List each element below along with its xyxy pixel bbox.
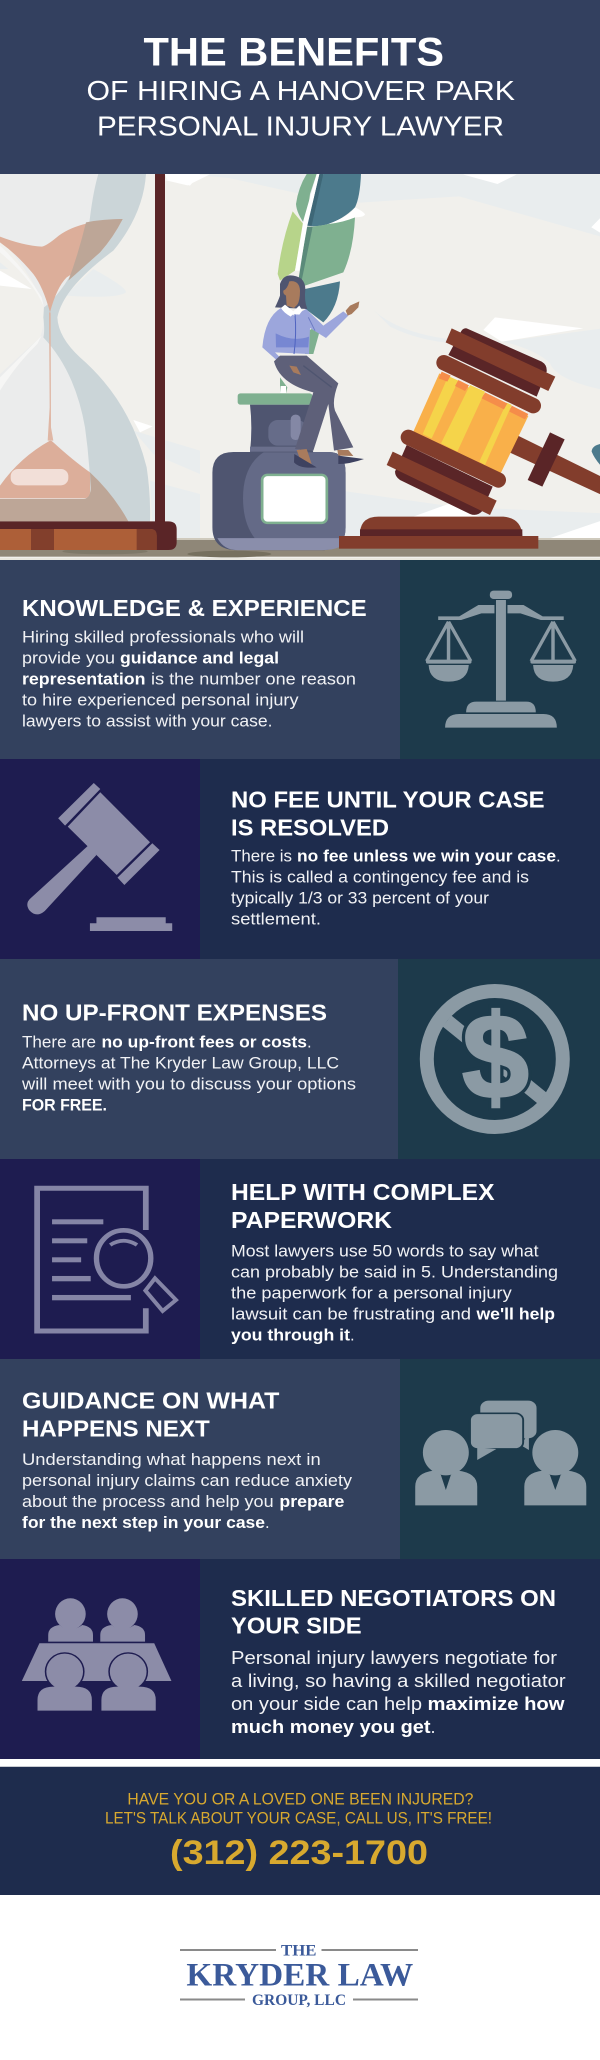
- text block: .: [307, 1033, 312, 1052]
- icon: scales of justice: [426, 591, 576, 728]
- heading: NO FEE UNTIL YOUR CASE: [231, 787, 545, 813]
- heading: HAPPENS NEXT: [22, 1415, 210, 1441]
- heading: SKILLED NEGOTIATORS ON: [231, 1585, 556, 1611]
- panel: no fee until resolved: [0, 759, 600, 959]
- heading: KNOWLEDGE & EXPERIENCE: [22, 595, 367, 621]
- panel: skilled negotiators: [0, 1559, 600, 1759]
- text block: the paperwork for a personal injury: [231, 1284, 512, 1303]
- icon: document with magnifier: [37, 1188, 176, 1331]
- text block: about the process and help you: [22, 1492, 274, 1511]
- logo: The Kryder Law Group: KRYDER LAW: [186, 1958, 413, 1994]
- heading: PAPERWORK: [231, 1207, 392, 1233]
- subtitle: OF HIRING A HANOVER PARK: [86, 75, 515, 106]
- text block: [231, 847, 561, 929]
- heading: [231, 1585, 556, 1638]
- text block: lawsuit can be frustrating and: [231, 1305, 471, 1324]
- heading: HELP WITH COMPLEX: [231, 1179, 495, 1205]
- floor: [0, 538, 600, 560]
- text block: prepare: [279, 1492, 344, 1511]
- icon: ink bottle: [212, 393, 346, 550]
- text block: to hire experienced personal injury: [22, 690, 299, 709]
- text block: Understanding what happens next in: [22, 1450, 321, 1469]
- heading: IS RESOLVED: [231, 815, 389, 841]
- icon: no dollar sign: $: [462, 990, 529, 1124]
- heading: GUIDANCE ON WHAT: [22, 1388, 280, 1414]
- callout text: HAVE YOU OR A LOVED ONE BEEN INJURED?: [127, 1789, 473, 1808]
- panel: title header: [0, 0, 600, 174]
- text block: typically 1/3 or 33 percent of your: [231, 889, 489, 908]
- panel: help with complex paperwork: [0, 1159, 600, 1359]
- text block: .: [556, 847, 561, 866]
- text block: much money you get: [231, 1717, 431, 1737]
- logo: The Kryder Law Group: GROUP, LLC: [252, 1992, 346, 2009]
- icon: feather: [278, 174, 365, 393]
- panel: guidance on what happens next: [0, 1359, 600, 1559]
- text block: [231, 1242, 558, 1345]
- text block: can probably be said in 5. Understanding: [231, 1263, 558, 1282]
- text block: Most lawyers use 50 words to say what: [231, 1242, 539, 1261]
- text block: .: [430, 1717, 436, 1737]
- text block: settlement.: [231, 910, 321, 929]
- text block: [22, 627, 356, 730]
- text block: we'll help: [475, 1305, 555, 1324]
- subtitle: [86, 75, 515, 142]
- text block: no fee unless we win your case: [297, 847, 556, 866]
- icon: gavel: [339, 328, 600, 549]
- text block: Personal injury lawyers negotiate for: [231, 1648, 557, 1668]
- text block: for the next step in your case: [22, 1513, 265, 1532]
- subtitle: PERSONAL INJURY LAWYER: [97, 111, 504, 142]
- icon: hourglass: [0, 174, 177, 550]
- text block: .: [265, 1513, 270, 1532]
- text block: lawyers to assist with your case.: [22, 711, 272, 730]
- callout text: [105, 1789, 492, 1827]
- text block: [231, 1648, 566, 1737]
- text block: no up-front fees or costs: [102, 1033, 307, 1052]
- panel: call to action: [0, 1766, 600, 1895]
- icon: gavel: [27, 783, 172, 931]
- text block: you through it: [231, 1326, 350, 1345]
- text block: personal injury claims can reduce anxiety: [22, 1471, 353, 1490]
- icon: two people talking: [415, 1401, 586, 1505]
- phone number: (312) 223-1700: [170, 1834, 428, 1872]
- heading: NO UP-FRONT EXPENSES: [22, 999, 327, 1025]
- text block: maximize how: [428, 1694, 566, 1714]
- text block: representation: [22, 669, 146, 688]
- text block: on your side can help: [231, 1694, 422, 1714]
- text block: .: [350, 1326, 355, 1345]
- text block: There are: [22, 1033, 96, 1052]
- panel: no up-front expenses: [0, 959, 600, 1159]
- heading: [231, 787, 545, 841]
- panel: knowledge and experience: [0, 560, 600, 759]
- text block: FOR FREE.: [22, 1096, 107, 1115]
- illustration: hourglass, woman on ink bottle and gavel: [0, 174, 600, 560]
- text block: will meet with you to discuss your options: [21, 1075, 356, 1094]
- text block: is the number one reason: [151, 669, 356, 688]
- callout text: LET'S TALK ABOUT YOUR CASE, CALL US, IT'S FREE!: [105, 1808, 492, 1827]
- icon: people at a table: [22, 1598, 171, 1711]
- text block: This is called a contingency fee and is: [231, 868, 529, 887]
- text block: [22, 1450, 353, 1532]
- logo: The Kryder Law Group: [180, 1943, 418, 2009]
- text block: [21, 1033, 356, 1115]
- heading: YOUR SIDE: [231, 1612, 362, 1638]
- icon: no dollar sign: [427, 990, 563, 1127]
- text block: Hiring skilled professionals who will: [22, 627, 304, 646]
- text block: a living, so having a skilled negotiator: [231, 1671, 566, 1691]
- icon: no dollar sign: $: [462, 990, 529, 1124]
- heading: [22, 1388, 280, 1441]
- text block: There is: [231, 847, 292, 866]
- text block: Attorneys at The Kryder Law Group, LLC: [22, 1054, 339, 1073]
- title: THE BENEFITS: [144, 30, 444, 74]
- text block: provide you: [22, 648, 115, 667]
- heading: [231, 1179, 495, 1233]
- text block: guidance and legal: [120, 648, 279, 667]
- logo: The Kryder Law Group: THE: [281, 1943, 316, 1960]
- icon: seated woman: [262, 275, 364, 468]
